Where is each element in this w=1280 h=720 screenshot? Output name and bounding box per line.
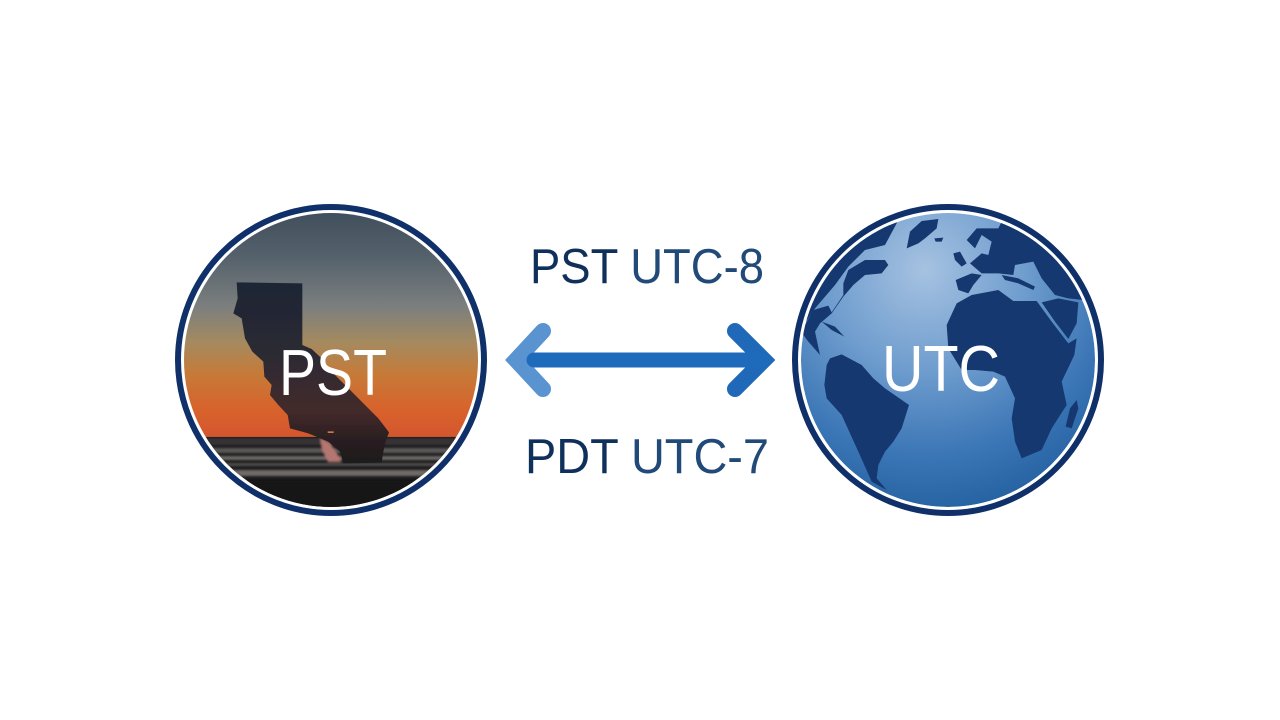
icon: California silhouette — [233, 282, 389, 463]
Arabia — [1042, 298, 1078, 339]
label: UTC: UTC — [882, 332, 1000, 405]
circle ring: PST — [178, 207, 484, 513]
Eurasia — [967, 215, 1105, 308]
text: PDT UTC-7: PDT UTC-7 — [525, 430, 769, 484]
globe — [792, 213, 1105, 507]
Greenland — [907, 219, 938, 248]
South America — [824, 354, 909, 490]
panel: PST sunset circle — [178, 207, 484, 513]
Madagascar — [1066, 400, 1078, 428]
label: PST: PST — [279, 336, 387, 409]
infographic canvas — [175, 204, 1104, 516]
continents — [803, 219, 1082, 490]
sunset scene — [184, 213, 478, 510]
Africa — [947, 290, 1077, 458]
text: PST UTC-8: PST UTC-8 — [530, 240, 764, 294]
panel: UTC globe circle — [792, 207, 1105, 513]
North America — [803, 260, 888, 355]
arrow: double-headed conversion arrow — [516, 331, 764, 389]
Balkans and Turkey — [1002, 275, 1035, 290]
circle ring: UTC — [795, 207, 1101, 513]
Britain — [953, 252, 967, 267]
Spain — [956, 273, 982, 293]
